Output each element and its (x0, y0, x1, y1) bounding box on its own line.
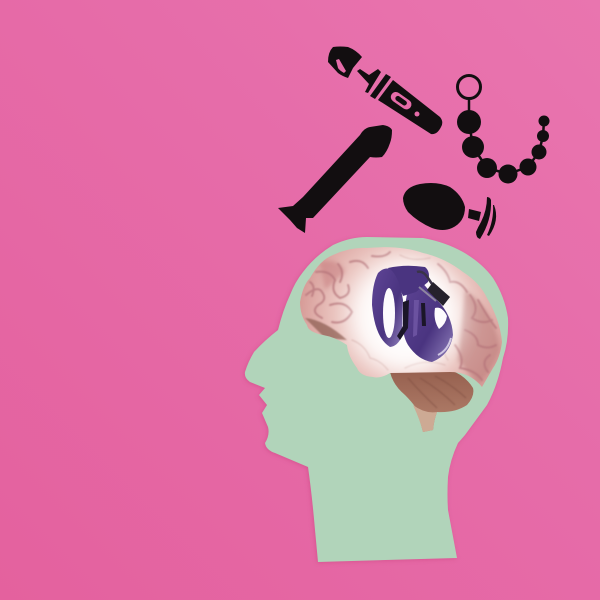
dark gap (397, 300, 409, 340)
white glow (356, 262, 460, 370)
icon: dildo (278, 125, 392, 233)
top bridge (388, 266, 429, 296)
brain folds (306, 252, 496, 380)
darker side patches (458, 290, 500, 385)
right cage body (403, 272, 453, 362)
padlock (417, 272, 450, 306)
icon: wand massager (328, 46, 442, 134)
icon: anal beads (457, 76, 550, 184)
brain (300, 247, 502, 432)
left ring (372, 268, 403, 347)
cerebellum and brain stem (390, 370, 473, 432)
cage openings (421, 303, 426, 326)
icon: butt plug (403, 183, 496, 239)
head silhouette (244, 237, 508, 563)
chastity cage (372, 266, 453, 362)
cerebrum (300, 247, 502, 387)
